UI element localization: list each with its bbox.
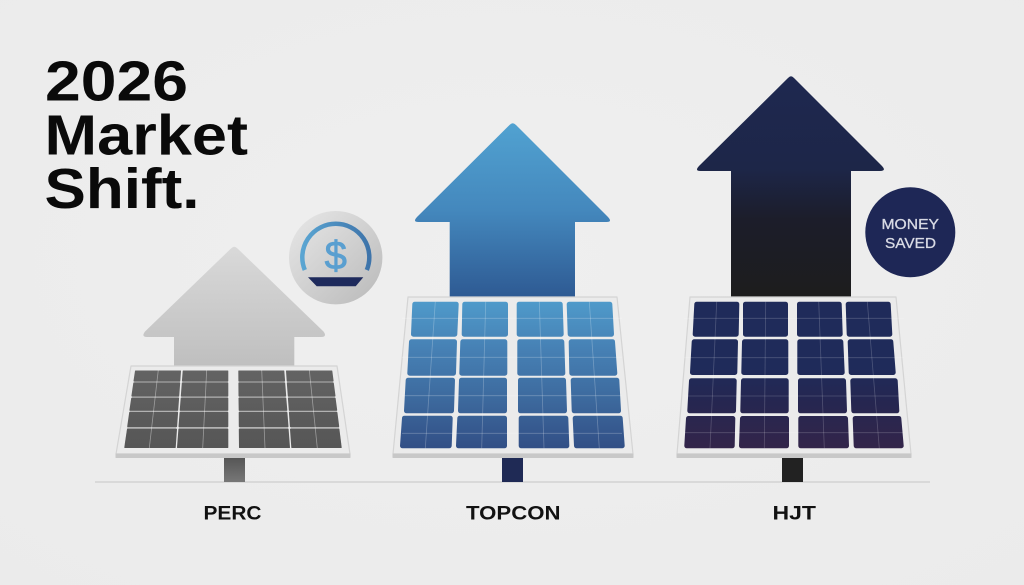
- panel: PERC: [116, 247, 350, 524]
- arrow: HJT navy: [697, 76, 884, 297]
- label: HJT: HJT: [772, 504, 816, 524]
- label: TOPCON: TOPCON: [466, 504, 560, 524]
- solar panel: TOPCON: [393, 297, 633, 458]
- title: 2026: [45, 50, 188, 114]
- badge: money saved: SAVED: [885, 236, 936, 252]
- badge: money saved: [865, 187, 955, 277]
- icon: savings gauge badge: [289, 211, 382, 304]
- stand: HJT: [782, 458, 803, 482]
- title: [44, 50, 248, 221]
- solar panel: PERC: [116, 366, 350, 458]
- arrow: PERC grey: [143, 247, 325, 366]
- title: Market: [44, 104, 248, 168]
- solar panel: HJT: [677, 297, 911, 458]
- label: PERC: PERC: [204, 504, 262, 524]
- stand: PERC: [224, 458, 245, 482]
- panel: TOPCON: [393, 123, 633, 524]
- panel: HJT: [677, 76, 911, 524]
- stand: TOPCON: [502, 458, 523, 482]
- arrow: TOPCON blue: [415, 123, 610, 297]
- title: Shift.: [44, 157, 200, 221]
- icon: savings gauge badge: $: [325, 234, 347, 278]
- badge: money saved: MONEY: [882, 217, 939, 233]
